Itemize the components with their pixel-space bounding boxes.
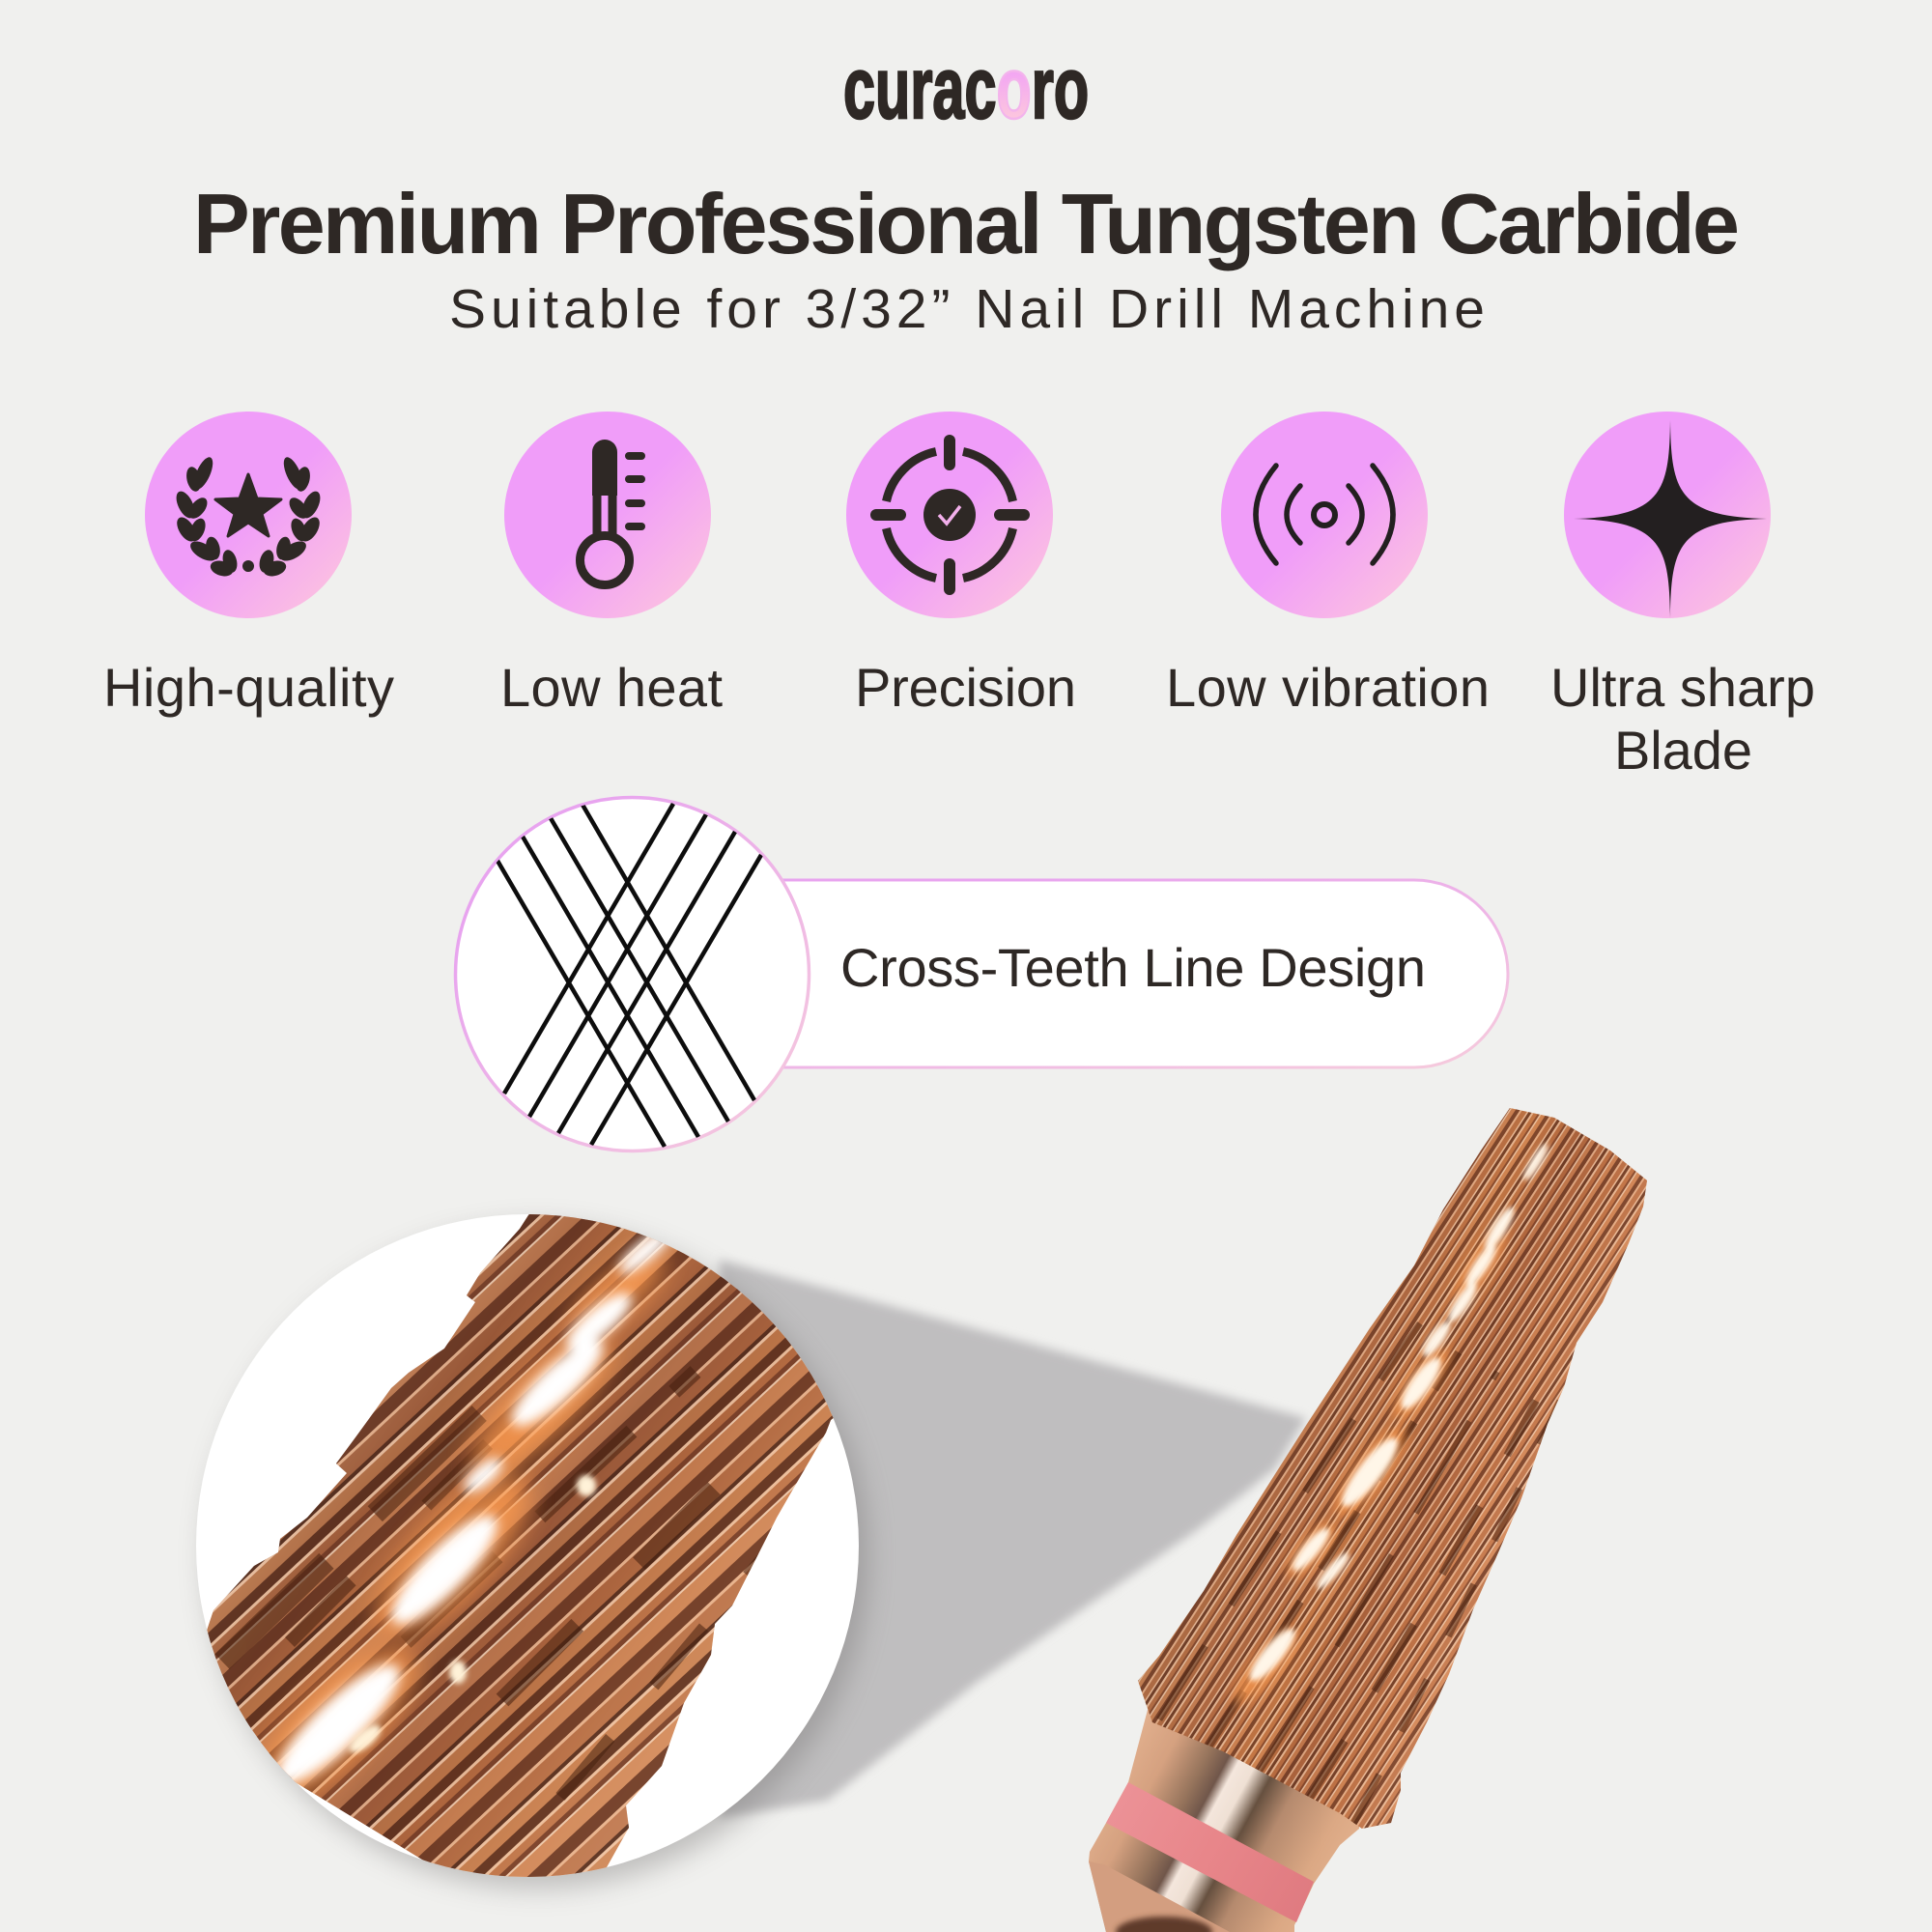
drill bit product (1089, 1101, 1652, 1932)
label: ultra sharp blade: Blade (1614, 720, 1752, 781)
panel: magnified drill detail (193, 1213, 877, 1901)
feature: ultra sharp blade (1550, 412, 1815, 781)
label: precision: Precision (855, 657, 1076, 718)
drill collar lower cone (1089, 1861, 1230, 1932)
magnified copper flutes (207, 1214, 833, 1877)
label: ultra sharp blade (1550, 657, 1815, 781)
icon: vibration waves (1221, 412, 1428, 618)
magnifier white disc (196, 1214, 859, 1877)
feature: high-quality (103, 412, 394, 718)
feature: low vibration (1166, 412, 1490, 718)
label: high-quality: High-quality (103, 657, 394, 718)
lens: cross-teeth line diagram (456, 798, 810, 1151)
feature: low heat (500, 412, 723, 718)
feature: precision (846, 412, 1076, 718)
label: low heat: Low heat (500, 657, 723, 718)
drill colour ring (1106, 1782, 1314, 1922)
icon: laurel wreath with star (145, 412, 352, 618)
panel: cross-teeth line design callout (456, 798, 1508, 1151)
magnifier light cone shadow (720, 1260, 1306, 1818)
label: low vibration: Low vibration (1166, 657, 1490, 718)
label: cross-teeth line design: Cross-Teeth Line Design (840, 937, 1426, 998)
icon: thermometer (504, 412, 711, 618)
magnifier circle shadow (206, 1226, 868, 1889)
drill shank (1089, 1710, 1359, 1932)
pill background (676, 880, 1508, 1067)
subtitle: Suitable for 3/32” Nail Drill Machine (449, 278, 1485, 340)
icon: target with check (846, 412, 1053, 618)
drill fluted head (1130, 1101, 1652, 1835)
title: Premium Professional Tungsten Carbide (193, 176, 1740, 271)
label: ultra sharp blade: Ultra sharp (1550, 657, 1815, 718)
logo: curacoro: curacoro (843, 41, 1089, 137)
icon: four-point star (1564, 412, 1771, 618)
